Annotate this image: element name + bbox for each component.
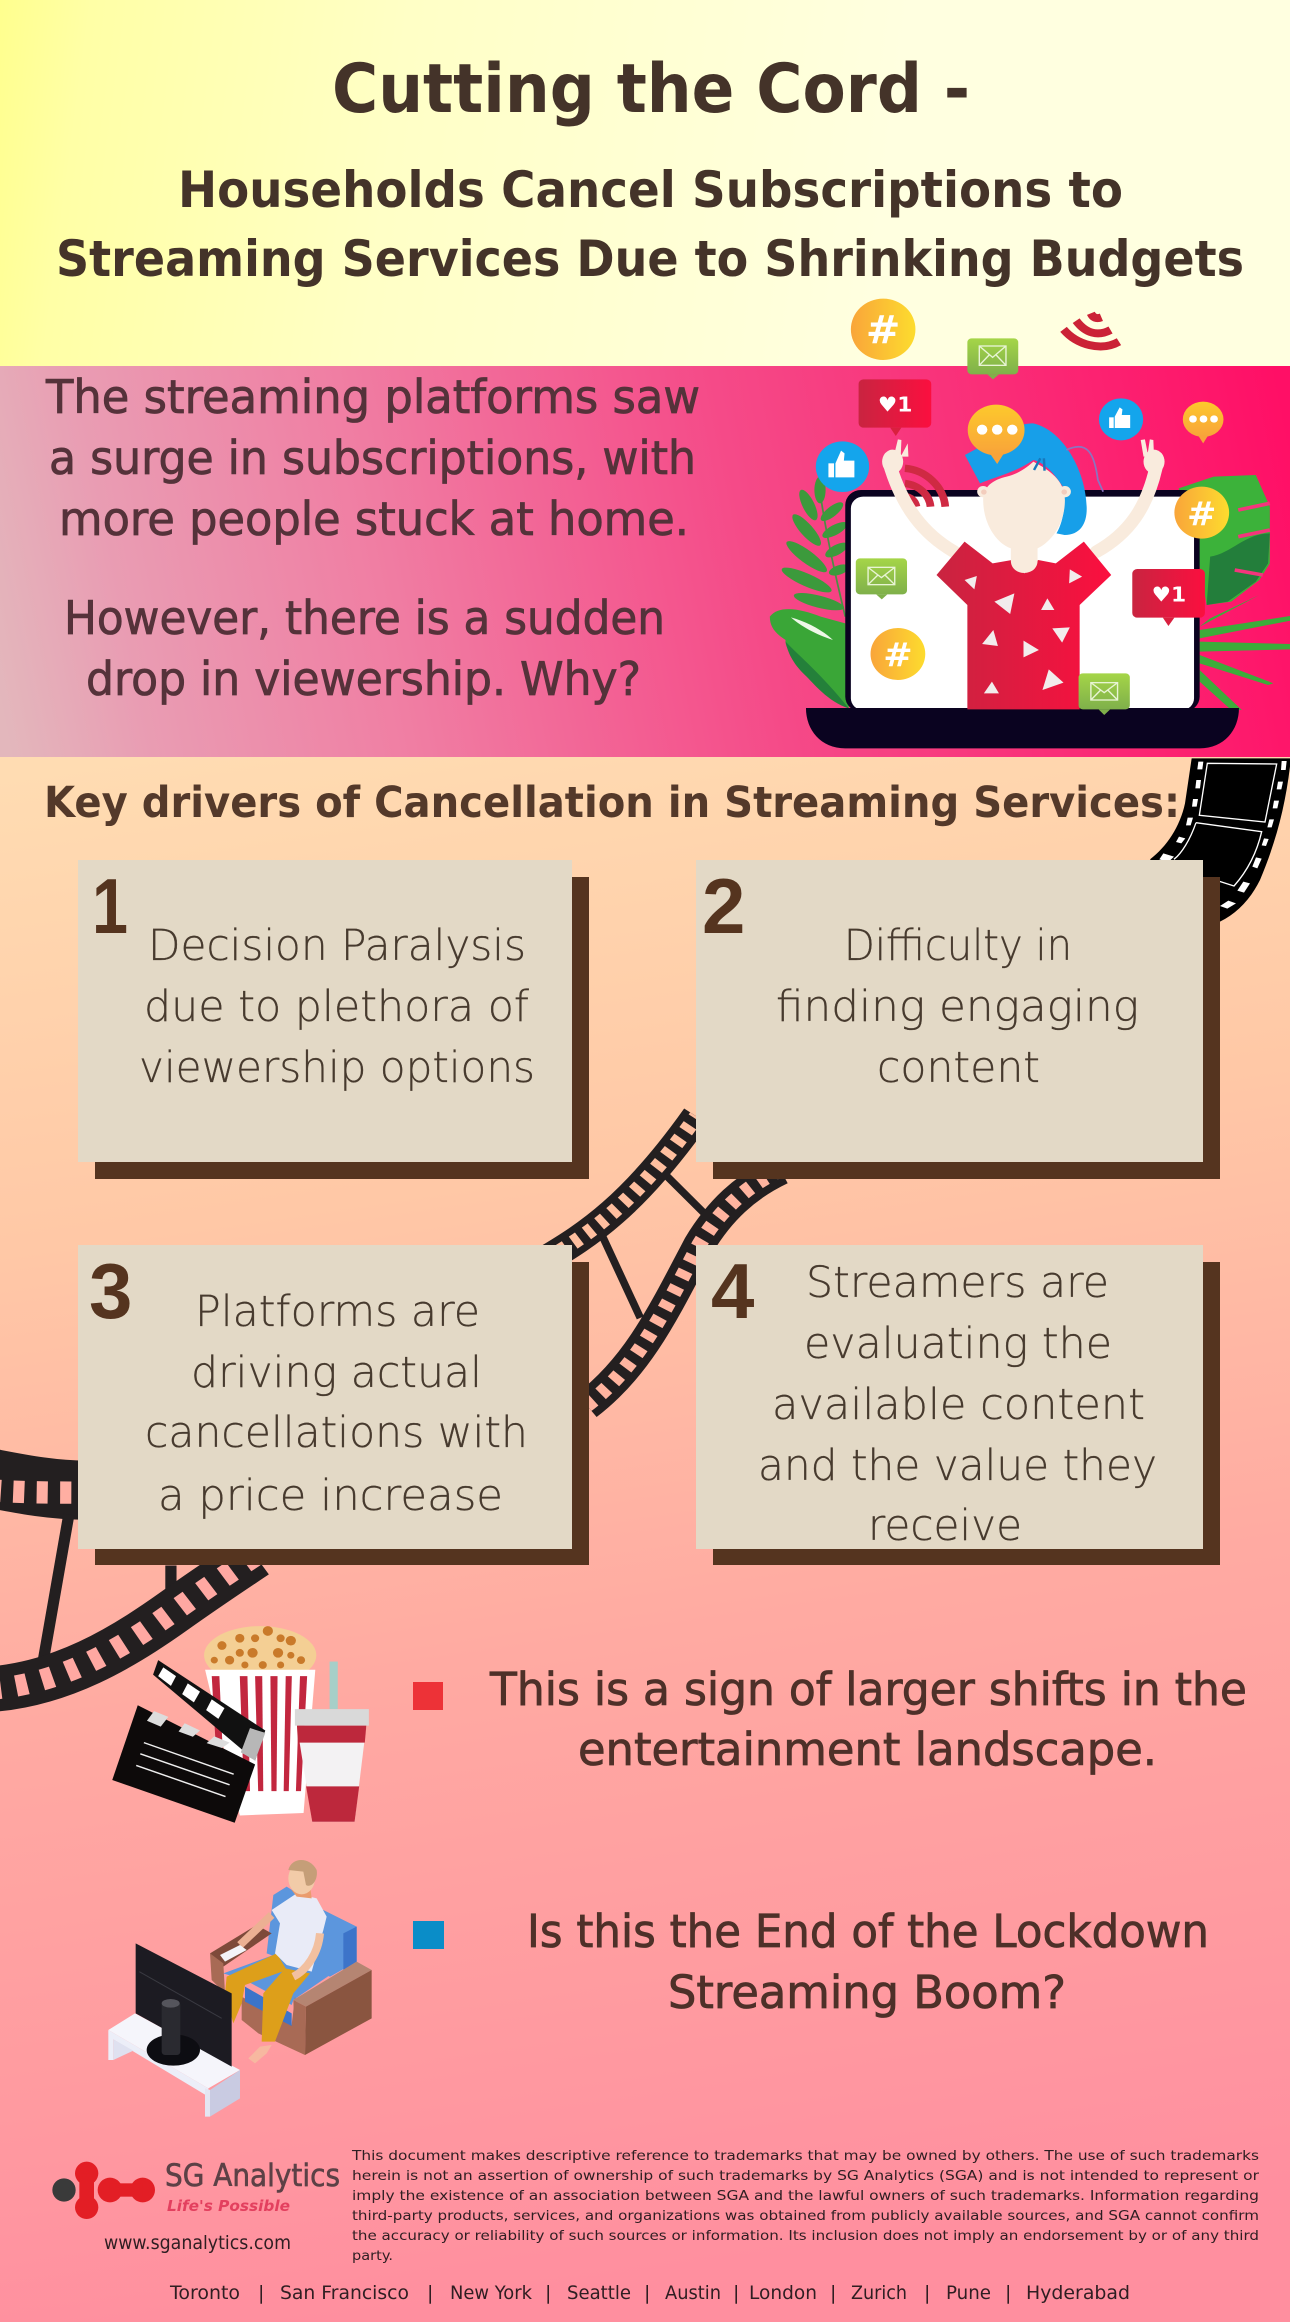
intro text bbox=[45, 370, 700, 706]
intro text: drop in viewership. Why? bbox=[86, 652, 641, 706]
office cities: Pune bbox=[946, 2282, 991, 2304]
statement: end of boom: Streaming Boom? bbox=[668, 1966, 1066, 2019]
office cities: | bbox=[924, 2282, 930, 2304]
like notification badges: ♥1 bbox=[1151, 583, 1186, 607]
bullet: blue square bbox=[413, 1921, 444, 1949]
website: www.sganalytics.com bbox=[104, 2232, 291, 2254]
card 3: Platforms are bbox=[195, 1287, 480, 1337]
card 2: finding engaging bbox=[776, 982, 1139, 1032]
wifi icon top bbox=[1064, 313, 1119, 346]
card 1: due to plethora of bbox=[144, 982, 529, 1032]
office cities: | bbox=[1005, 2282, 1011, 2304]
card 4 bbox=[696, 1245, 1220, 1565]
person bbox=[882, 423, 1165, 709]
film strip: top right bbox=[1150, 758, 1290, 922]
card 4: and the value they bbox=[758, 1441, 1157, 1491]
hashtag badges: # bbox=[866, 307, 901, 353]
statement: end of boom bbox=[527, 1905, 1209, 2019]
like notification badges bbox=[859, 379, 1205, 626]
illustration: person on laptop with social icons bbox=[770, 299, 1290, 748]
statement: larger shifts: This is a sign of larger shifts in the bbox=[489, 1663, 1247, 1716]
disclaimer: herein is not an assertion of ownership of such trademarks by SG Analytics (SGA) and is not intended to represent or bbox=[352, 2168, 1260, 2184]
office cities: London bbox=[749, 2282, 817, 2304]
card 2: Difficulty in bbox=[844, 921, 1072, 971]
office cities: Seattle bbox=[567, 2282, 631, 2304]
disclaimer: third-party products, services, and organizations was obtained from publicly available sources, and SGA cannot confirm bbox=[352, 2208, 1259, 2224]
office cities bbox=[169, 2282, 1130, 2304]
card 3 bbox=[78, 1245, 589, 1565]
office cities: | bbox=[644, 2282, 650, 2304]
intro text: a surge in subscriptions, with bbox=[49, 431, 696, 485]
card 1: 1 bbox=[92, 862, 128, 950]
statement: end of boom: Is this the End of the Lockdown bbox=[527, 1905, 1209, 1958]
intro text: more people stuck at home. bbox=[59, 492, 689, 546]
bullet: red square bbox=[413, 1682, 443, 1710]
disclaimer: party. bbox=[352, 2248, 393, 2264]
card 4: receive bbox=[868, 1501, 1022, 1551]
hashtag badges: # bbox=[883, 636, 913, 675]
right monstera leaf bbox=[1179, 475, 1270, 605]
hashtag badges: # bbox=[1187, 495, 1216, 534]
office cities: | bbox=[258, 2282, 264, 2304]
statement: larger shifts bbox=[489, 1663, 1247, 1776]
thumbs-up badges bbox=[816, 398, 1143, 492]
card 2: 2 bbox=[702, 862, 745, 950]
key drivers heading: Key drivers of Cancellation in Streaming Services: bbox=[44, 778, 1180, 828]
office cities: San Francisco bbox=[280, 2282, 409, 2304]
card 2: content bbox=[877, 1043, 1040, 1093]
like notification badges: ♥1 bbox=[878, 393, 912, 417]
disclaimer: imply the existence of an association between SGA and the lawful owners of such trademarks. Information regarding bbox=[352, 2188, 1259, 2204]
logo: SG Analytics bbox=[52, 2158, 340, 2219]
card 3: cancellations with bbox=[145, 1408, 528, 1458]
office cities: New York bbox=[450, 2282, 532, 2304]
card 4: available content bbox=[772, 1380, 1145, 1430]
intro text: The streaming platforms saw bbox=[45, 370, 700, 424]
background: main panel bbox=[0, 757, 1290, 2322]
office cities: Hyderabad bbox=[1026, 2282, 1130, 2304]
disclaimer bbox=[351, 2148, 1260, 2264]
card 3: driving actual bbox=[191, 1348, 482, 1398]
card 3: 3 bbox=[89, 1247, 132, 1335]
card 4: evaluating the bbox=[804, 1319, 1112, 1369]
card 1: Decision Paralysis bbox=[148, 921, 526, 971]
card 4: Streamers are bbox=[806, 1258, 1109, 1308]
icon: man watching TV on sofa bbox=[108, 1860, 372, 2117]
intro text: However, there is a sudden bbox=[64, 591, 665, 645]
wifi icon on laptop bbox=[905, 468, 945, 507]
right palm blades bbox=[1200, 595, 1290, 710]
icon: popcorn, drink and clapperboard bbox=[112, 1626, 369, 1823]
office cities: Zurich bbox=[851, 2282, 907, 2304]
office cities: | bbox=[830, 2282, 836, 2304]
title: Households Cancel Subscriptions to bbox=[178, 161, 1123, 219]
left large leaf bbox=[770, 609, 849, 708]
logo: SG Analytics: SG Analytics bbox=[165, 2158, 340, 2194]
card 1: viewership options bbox=[139, 1043, 535, 1093]
chat badges bbox=[968, 402, 1224, 464]
card 2 bbox=[696, 860, 1220, 1179]
mail badges bbox=[856, 338, 1130, 715]
statement: larger shifts: entertainment landscape. bbox=[578, 1723, 1157, 1776]
office cities: Toronto bbox=[169, 2282, 240, 2304]
office cities: | bbox=[427, 2282, 433, 2304]
disclaimer: This document makes descriptive reference to trademarks that may be owned by others. The use of such trademarks bbox=[351, 2148, 1259, 2164]
office cities: | bbox=[733, 2282, 739, 2304]
office cities: Austin bbox=[665, 2282, 721, 2304]
panel: pink intro band bbox=[0, 366, 1290, 757]
background: header panel bbox=[0, 0, 1290, 366]
card 1 bbox=[78, 860, 589, 1179]
card 3: a price increase bbox=[158, 1471, 503, 1521]
laptop bbox=[806, 490, 1239, 748]
film strip: centre and lower left bbox=[0, 1116, 781, 1689]
disclaimer: the accuracy or reliability of such sources or information. Its inclusion does not imply an endorsement by or of any third bbox=[352, 2228, 1259, 2244]
title bbox=[56, 50, 1244, 288]
logo: SG Analytics: Life's Possible bbox=[167, 2197, 290, 2215]
office cities: | bbox=[545, 2282, 551, 2304]
title: Cutting the Cord - bbox=[332, 50, 970, 129]
hashtag badges bbox=[851, 299, 1229, 680]
card 4: 4 bbox=[711, 1247, 754, 1335]
left fern bbox=[779, 477, 851, 617]
